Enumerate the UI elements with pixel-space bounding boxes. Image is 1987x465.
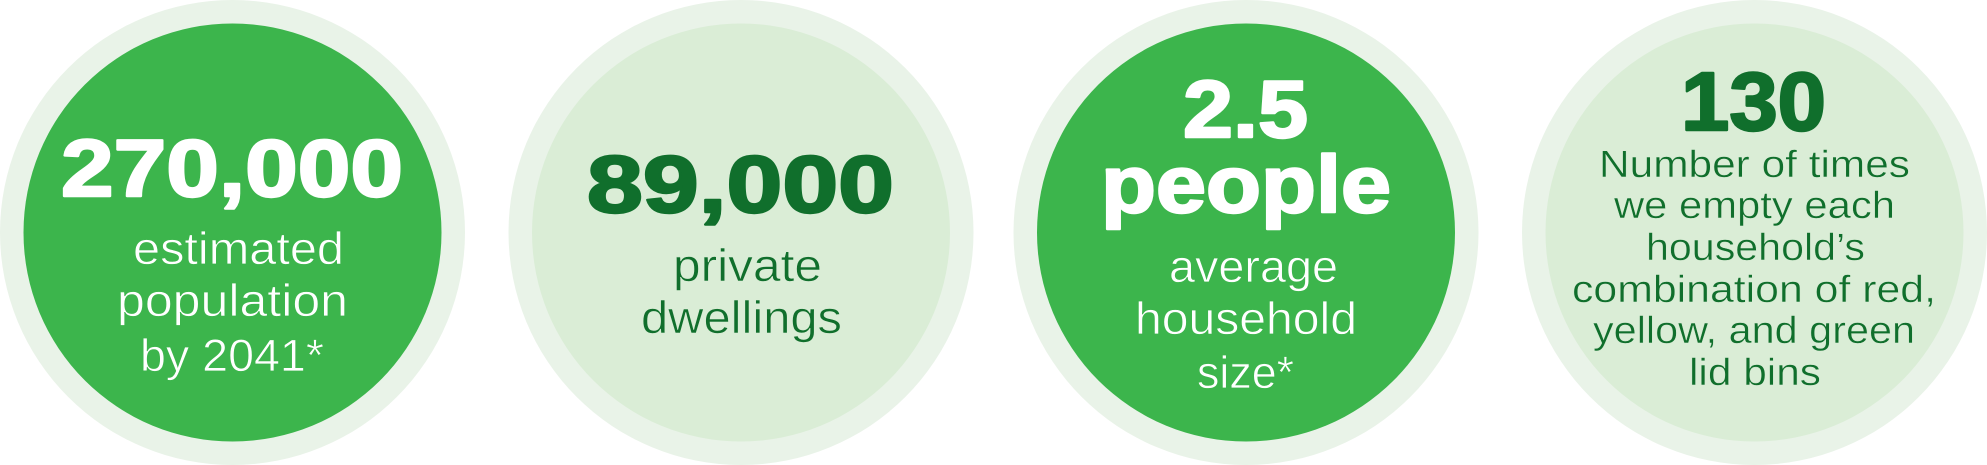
label: estimated population by 2041: by 2041* bbox=[140, 330, 324, 381]
label: number of times we empty bins: we empty each bbox=[1613, 185, 1895, 227]
inner disc 1 bbox=[24, 24, 442, 442]
outer ring 2 bbox=[508, 0, 974, 465]
label: estimated population by 2041 bbox=[117, 223, 348, 381]
label: number of times we empty bins: lid bins bbox=[1689, 352, 1821, 394]
number: 89,000: 89,000 bbox=[587, 140, 894, 230]
label: average household size: size* bbox=[1197, 347, 1294, 398]
label: number of times we empty bins: Number of times bbox=[1599, 144, 1910, 186]
outer ring 1 bbox=[0, 0, 465, 465]
label: private dwellings bbox=[641, 240, 842, 343]
inner disc 2 bbox=[532, 24, 950, 442]
inner disc 3 bbox=[1037, 24, 1455, 442]
label: average household size: household bbox=[1135, 293, 1357, 344]
label: private dwellings: private bbox=[673, 240, 822, 291]
label: number of times we empty bins bbox=[1572, 144, 1936, 394]
label: average household size bbox=[1135, 241, 1357, 398]
panel: bin collections bbox=[1522, 0, 1987, 465]
label: number of times we empty bins: combination of red, bbox=[1572, 269, 1936, 311]
label: estimated population by 2041: population bbox=[117, 275, 348, 326]
number: 270,000: 270,000 bbox=[61, 124, 403, 214]
panel: average household size bbox=[1014, 0, 1478, 465]
label: number of times we empty bins: yellow, and green bbox=[1593, 310, 1915, 352]
inner disc 4 bbox=[1546, 24, 1964, 442]
panel: private dwellings bbox=[508, 0, 974, 465]
number: 2.5 people: 2.5 bbox=[1183, 65, 1308, 155]
outer ring 4 bbox=[1522, 0, 1987, 465]
label: number of times we empty bins: household’s bbox=[1646, 227, 1865, 269]
number: 130: 130 bbox=[1681, 55, 1826, 148]
panel: estimated population bbox=[0, 0, 465, 465]
number: 2.5 people bbox=[1101, 65, 1391, 230]
label: estimated population by 2041: estimated bbox=[133, 223, 344, 274]
number: 2.5 people: people bbox=[1101, 140, 1391, 230]
outer ring 3 bbox=[1014, 0, 1478, 465]
label: private dwellings: dwellings bbox=[641, 292, 842, 343]
label: average household size: average bbox=[1169, 241, 1338, 292]
